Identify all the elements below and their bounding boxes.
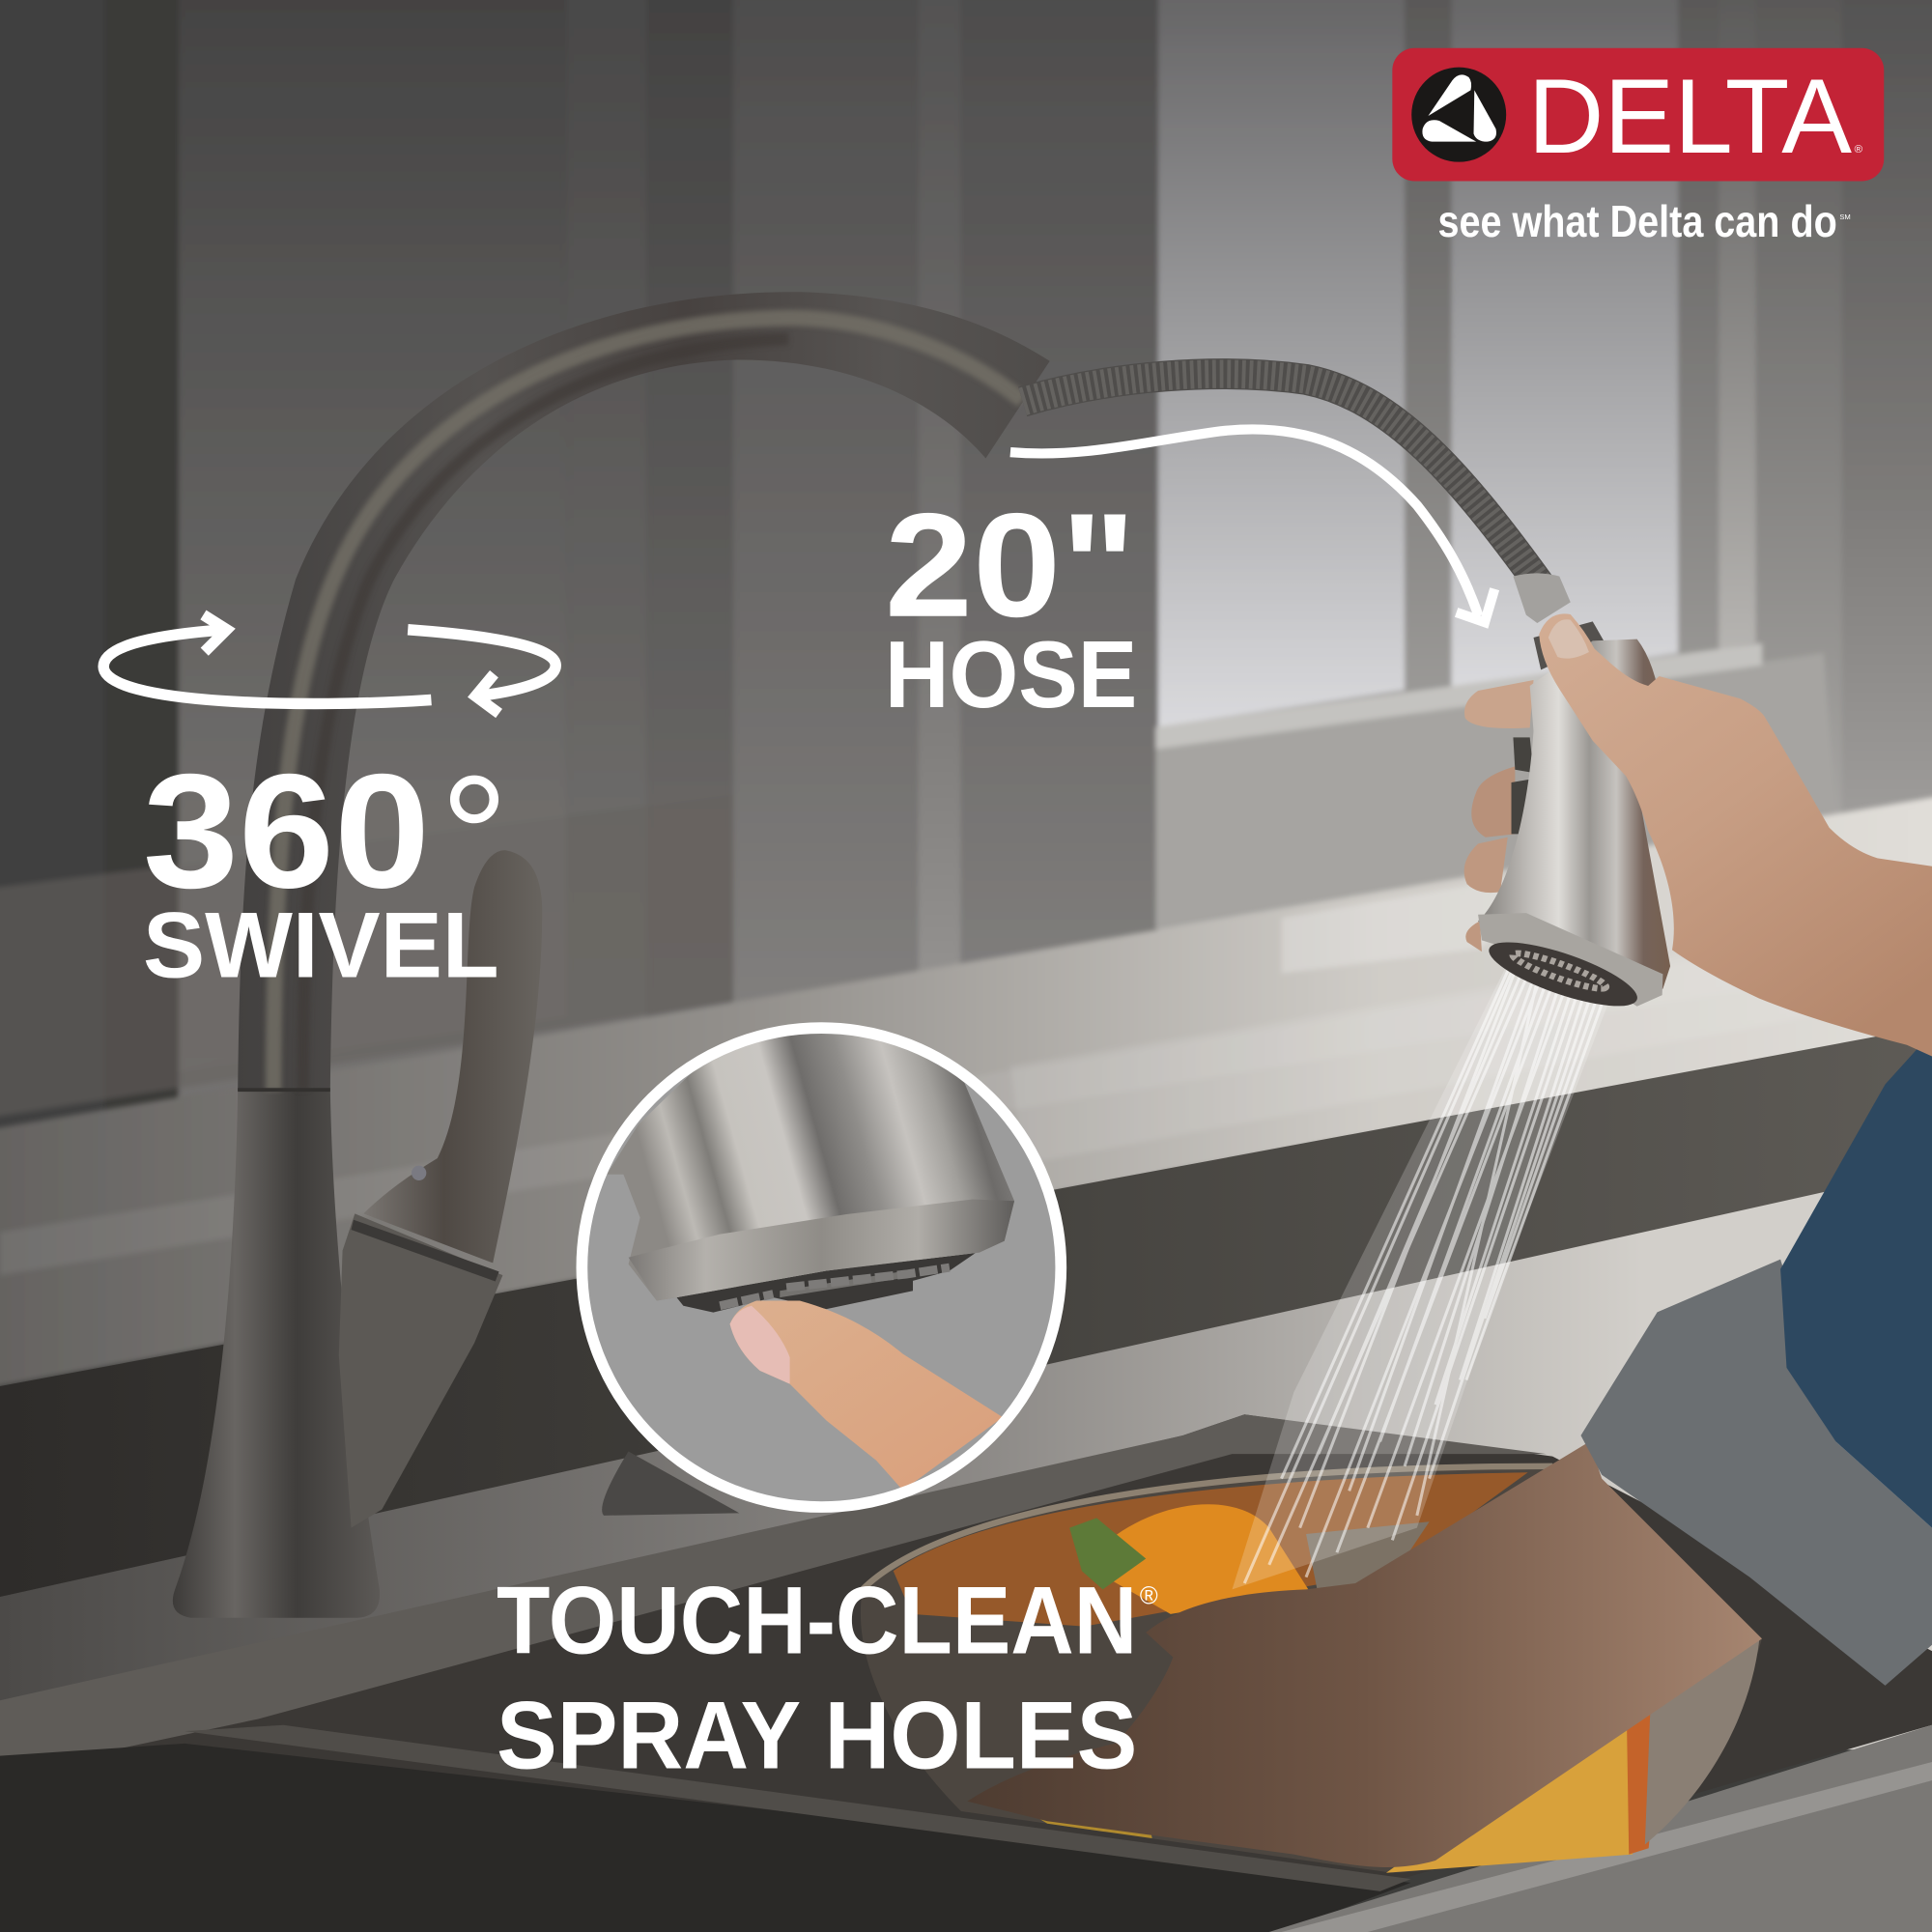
sleeve grey [1580,1260,1932,1686]
spray head face [1481,929,1645,1018]
logo wordmark: DELTA [1528,58,1852,176]
side sprayer base [602,1452,739,1516]
orange pepper [1084,1504,1312,1614]
granite backsplash [0,1029,1932,1602]
water spray [1233,967,1608,1589]
label: 360 swivel: 360 [143,740,430,922]
label: touch-clean spray holes: ® [1140,1583,1158,1610]
registered mark: ® [1855,144,1863,156]
nozzle metal body [607,1025,1014,1301]
label: 360 swivel [143,739,509,997]
label: 360 swivel: ° [440,739,509,932]
spray nozzle teeth [720,1267,950,1306]
tagline: see what Delta can do [1438,196,1837,246]
hand and thumb [1539,613,1932,1056]
tagline: SM [1839,213,1851,221]
window pane middle [1452,0,1678,688]
faucet base body [173,1091,380,1618]
countertop [0,1168,1932,1749]
yellow vegetable [1386,1688,1658,1873]
nozzle lower band [629,1200,1014,1301]
label: 20 inch hose: 20" [885,483,1136,648]
sleeve denim [1780,1033,1932,1528]
lower arm and hand [967,1033,1932,1867]
callout circle: touch-clean spray holes [582,1025,1061,1507]
colander mesh [1306,1521,1430,1596]
spray buttons [1513,737,1534,773]
spray head ring [1478,913,1662,1007]
fingernail [730,1306,790,1384]
faucet [173,292,1050,1618]
logo badge [1392,48,1884,181]
sink [0,1414,1932,1932]
hose connector [1513,573,1571,623]
colander with vegetables [861,1466,1762,1873]
label: touch-clean spray holes: SPRAY HOLES [497,1682,1137,1789]
faucet spout arc [238,292,1050,1091]
swivel arrows [103,614,555,714]
spray head held in hand [1464,573,1932,1056]
window pane left [1158,0,1405,727]
fingers [1464,680,1534,728]
hose [1023,374,1540,585]
spray nozzle underside [677,1253,976,1313]
hose length arrow [1010,429,1494,622]
faucet lever handle [363,850,542,1263]
label: touch-clean spray holes [497,1568,1158,1789]
valve body [339,1213,502,1528]
apron below window [1155,653,1836,930]
green stem [1069,1518,1146,1589]
label: 20 inch hose: HOSE [885,621,1137,727]
window pane right [1719,0,1756,649]
lower wall panels [0,795,733,1123]
spray body [1478,639,1670,1005]
window sill and ledge [0,788,1932,1395]
label: 360 swivel: SWIVEL [143,892,499,997]
label: touch-clean spray holes: TOUCH-CLEAN [497,1568,1137,1675]
logo mark [1411,68,1506,162]
label: 20 inch hose [885,483,1137,727]
finger [730,1301,1003,1491]
